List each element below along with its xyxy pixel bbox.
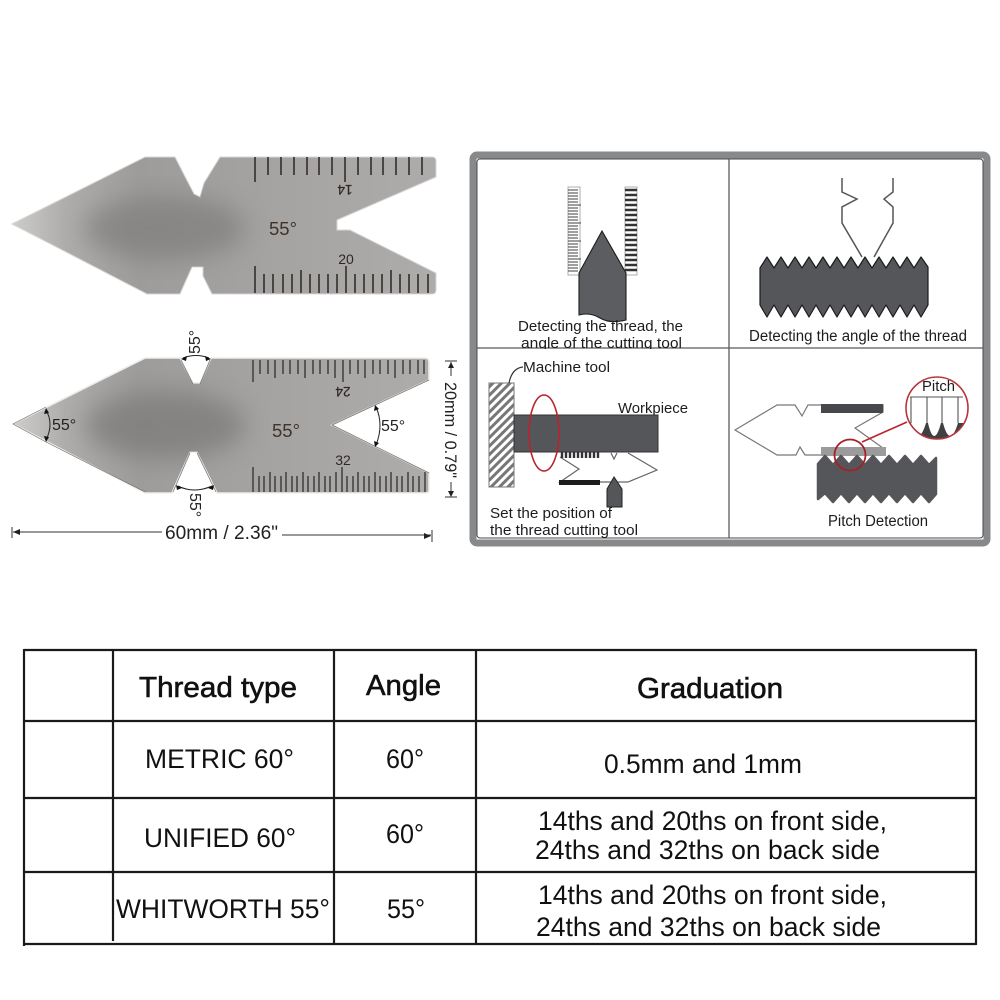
dimension: width bbox=[12, 523, 432, 544]
table grid bbox=[24, 650, 976, 944]
row: metric bbox=[145, 744, 802, 779]
ruler ticks top bbox=[255, 157, 428, 293]
magnifier circle bbox=[904, 377, 970, 445]
red highlight bbox=[529, 395, 559, 471]
diagram: pitch detection bbox=[735, 377, 970, 530]
engraved number 20: 20 bbox=[338, 251, 354, 267]
angle mark: bottom notch: 55° bbox=[186, 493, 203, 517]
gauge outline bbox=[735, 405, 883, 455]
diagram: set cutting tool position bbox=[489, 359, 688, 539]
zoom connector bbox=[862, 422, 907, 442]
ruler ticks back bbox=[253, 360, 425, 492]
row: unified bbox=[144, 806, 887, 865]
leader bbox=[509, 367, 523, 383]
dimension: height: 20mm / 0.79" bbox=[441, 382, 459, 478]
caption: Pitch Detection bbox=[828, 513, 928, 530]
row: whitworth bbox=[116, 880, 887, 942]
magnifier circle: Pitch bbox=[922, 378, 955, 395]
gauge body back bbox=[13, 358, 429, 493]
angle mark: tip bbox=[44, 408, 76, 442]
row: whitworth: WHITWORTH 55° bbox=[116, 894, 330, 924]
gauge tip bbox=[579, 231, 626, 322]
panel frame bbox=[473, 155, 987, 543]
angle mark: bottom notch bbox=[176, 485, 214, 517]
caption: Detecting the angle of the thread bbox=[749, 328, 967, 345]
label workpiece: Workpiece bbox=[618, 400, 688, 417]
gauge outline bbox=[560, 453, 657, 482]
machine tool hatch bbox=[489, 383, 514, 487]
gauge: back side bbox=[12, 330, 459, 544]
gauge: front side bbox=[12, 157, 436, 294]
row: metric: METRIC 60° bbox=[145, 744, 294, 774]
ruler left bbox=[568, 187, 580, 275]
row: metric: 60° bbox=[386, 744, 424, 774]
threaded rod bbox=[818, 456, 936, 502]
header row: Thread type bbox=[139, 672, 297, 704]
engraved number 14: 14 bbox=[337, 182, 353, 197]
panel: usage diagrams bbox=[473, 155, 987, 543]
gauge body front bbox=[12, 157, 436, 294]
row: unified: 24ths and 32ths on back side bbox=[535, 835, 880, 865]
diagram: set cutting tool position: the thread cutting tool bbox=[490, 522, 638, 539]
engraved number 32: 32 bbox=[335, 452, 351, 468]
row: unified: 60° bbox=[386, 819, 424, 849]
header row: Angle bbox=[366, 670, 441, 702]
row: metric: 0.5mm and 1mm bbox=[604, 749, 802, 779]
row: unified: 14ths and 20ths on front side, bbox=[538, 806, 887, 836]
angle mark: top notch: 55° bbox=[187, 330, 204, 354]
angle mark: side notch: 55° bbox=[381, 418, 405, 435]
label machine tool: Machine tool bbox=[523, 359, 610, 376]
workpiece bbox=[514, 415, 658, 452]
table: thread specifications bbox=[24, 649, 976, 946]
dimension: width: 60mm / 2.36" bbox=[165, 523, 278, 544]
gauge ticks bbox=[821, 404, 883, 413]
header row bbox=[139, 670, 783, 705]
angle mark: side notch bbox=[374, 405, 405, 447]
cutting tool bbox=[607, 477, 622, 507]
small circle bbox=[834, 440, 866, 470]
engraved angle 55: 55° bbox=[272, 420, 300, 441]
row: whitworth: 24ths and 32ths on back side bbox=[536, 912, 881, 942]
row: whitworth: 55° bbox=[387, 894, 425, 924]
threaded rod bbox=[760, 257, 928, 317]
caption: Set the position of bbox=[490, 505, 613, 522]
angle mark: top notch bbox=[181, 330, 211, 361]
gauge ticks bbox=[562, 452, 598, 458]
notch edge lines bbox=[13, 360, 429, 492]
caption: Detecting the thread, the bbox=[518, 318, 683, 335]
gauge outline bbox=[842, 178, 893, 257]
diagram: thread and cutting tool angle bbox=[515, 187, 685, 355]
diagram: thread and cutting tool angle: angle of the cutting tool bbox=[521, 335, 682, 352]
row: whitworth: 14ths and 20ths on front side, bbox=[538, 880, 887, 910]
engraved angle 55: 55° bbox=[269, 218, 297, 239]
diagram: thread angle bbox=[749, 178, 967, 345]
row: unified: UNIFIED 60° bbox=[144, 823, 296, 853]
header row: Graduation bbox=[637, 673, 783, 705]
ruler right bbox=[625, 187, 637, 275]
angle mark: tip: 55° bbox=[52, 417, 76, 434]
engraved number 24: 24 bbox=[335, 384, 351, 399]
